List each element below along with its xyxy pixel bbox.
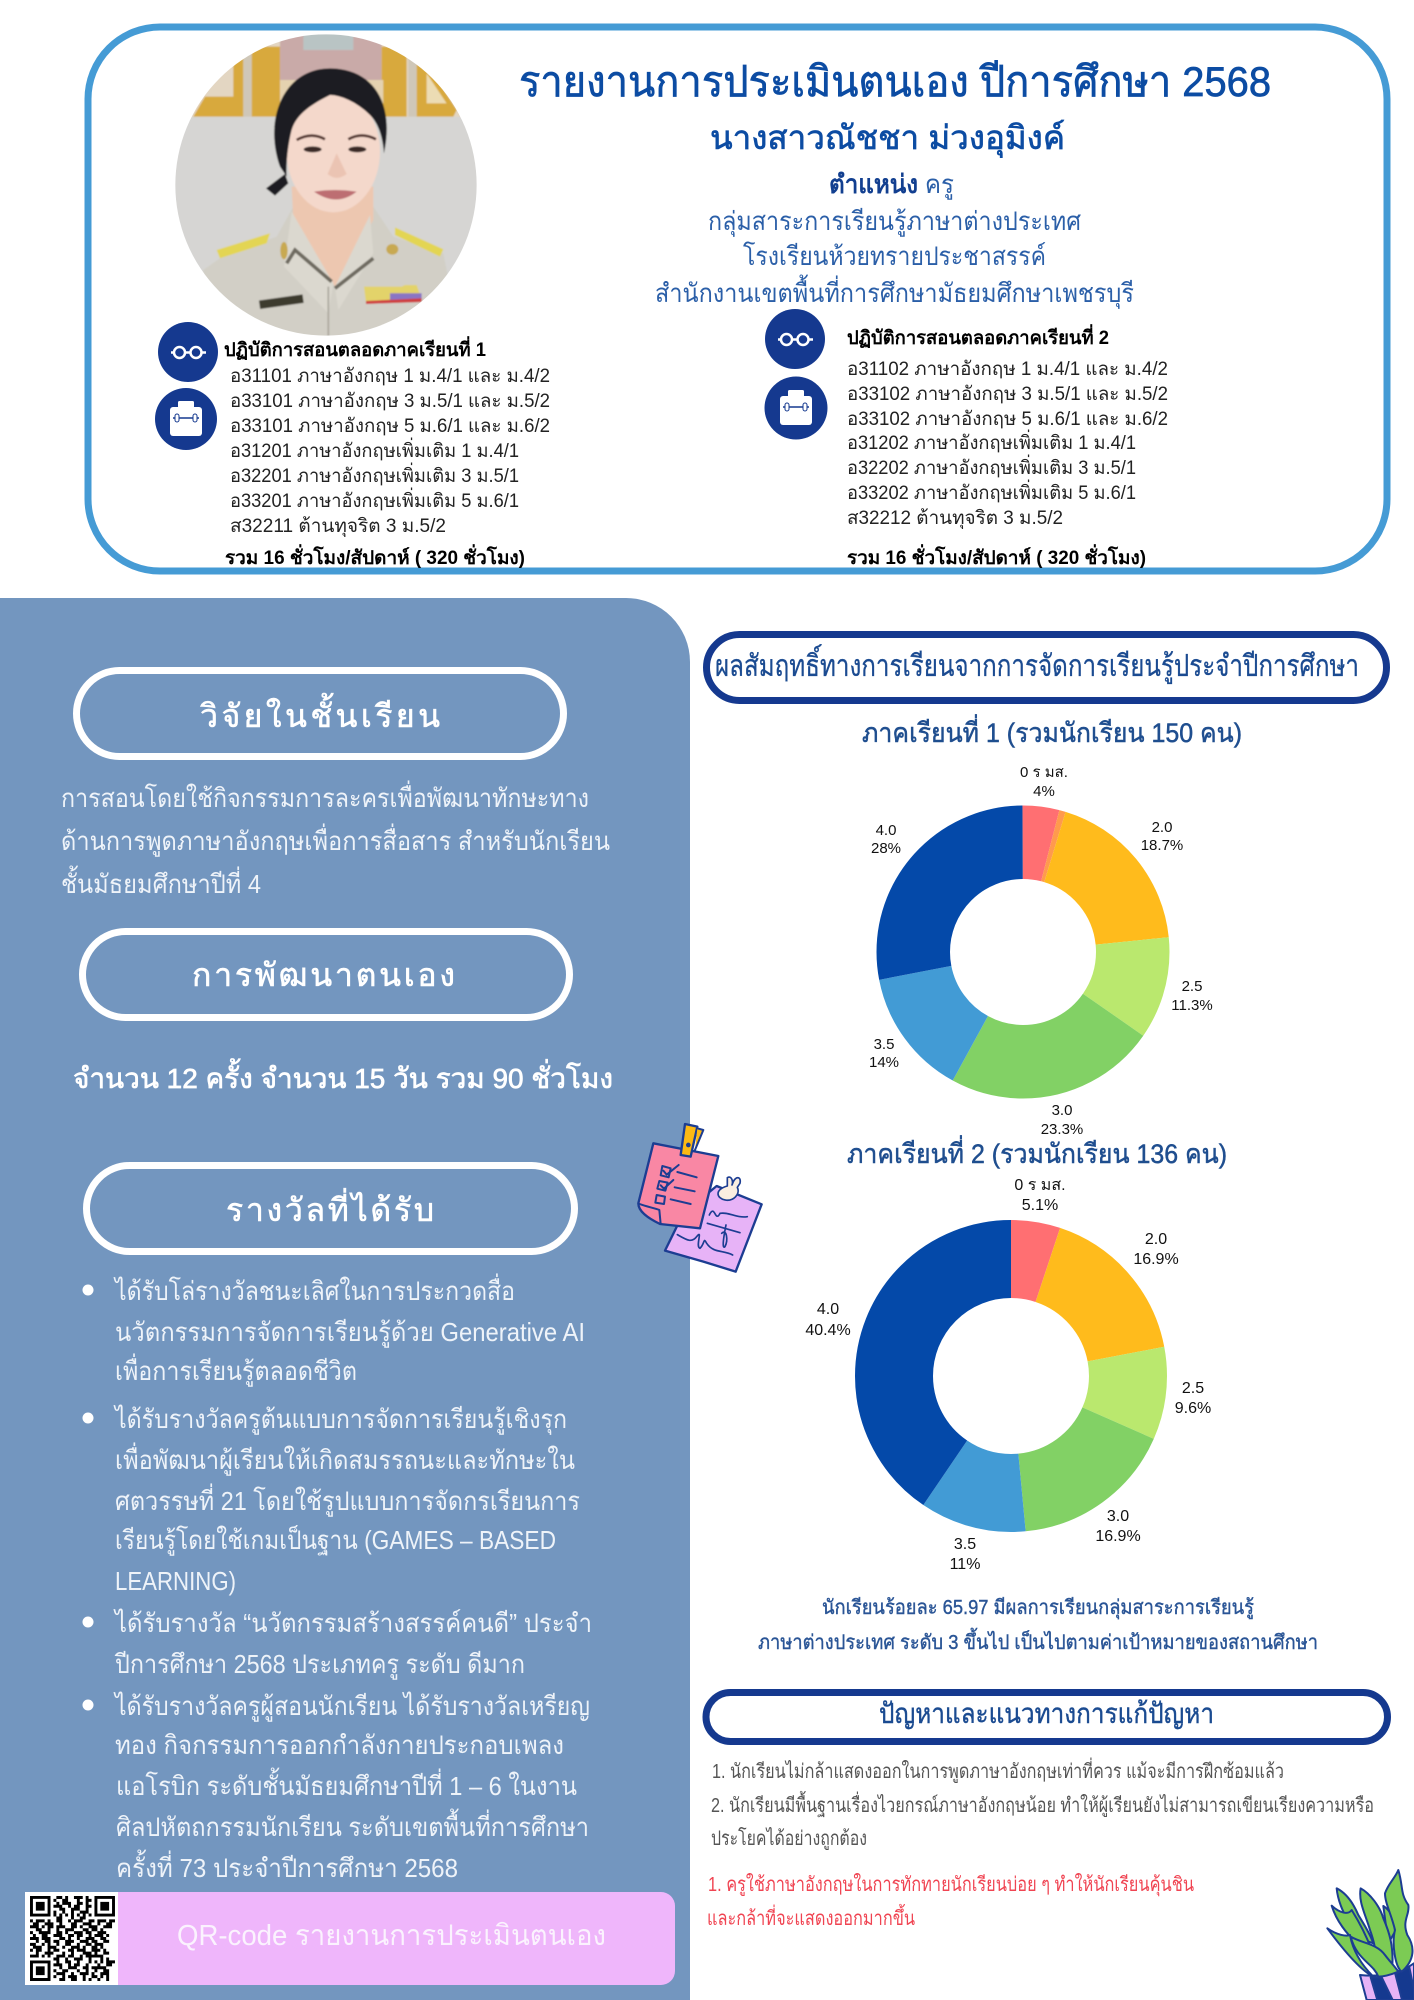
panel background xyxy=(0,598,690,2000)
semester 1 donut chart: 3.5 xyxy=(874,1036,894,1053)
semester 1 donut chart: 18.7% xyxy=(1141,837,1183,854)
problems text xyxy=(711,1757,1374,1851)
semester 1 donut chart xyxy=(869,764,1213,1138)
icon: sticky notes xyxy=(638,1124,762,1272)
solutions text xyxy=(707,1873,1194,1930)
semester 2 teaching list: อ31102 ภาษาอังกฤษ 1 ม.4/1 และ ม.4/2 xyxy=(847,359,1168,380)
problems heading xyxy=(706,1692,1388,1742)
semester 1 donut chart: 11.3% xyxy=(1171,997,1213,1014)
header panel xyxy=(88,27,1387,571)
semester 2 teaching list xyxy=(847,324,1168,569)
semester 2 donut chart: 2.0 xyxy=(1145,1231,1167,1248)
semester 2 donut chart: 4.0 xyxy=(817,1301,839,1318)
awards list: ได้รับรางวัลครูผู้สอนนักเรียน ได้รับรางวัลเหรียญ xyxy=(113,1691,590,1722)
semester 2 chart title: ภาคเรียนที่ 2 (รวมนักเรียน 136 คน) xyxy=(847,1135,1227,1169)
awards list: ครั้งที่ 73 ประจำปีการศึกษา 2568 xyxy=(116,1849,458,1883)
icon: briefcase semester 1 xyxy=(155,388,217,450)
semester 2 donut chart: 3.5 xyxy=(954,1536,976,1553)
icon: glasses semester 2 xyxy=(765,309,825,369)
semester 1 donut chart: 2.0 xyxy=(1152,819,1172,836)
semester 1 donut chart: 28% xyxy=(871,840,901,857)
semester 1 teaching list: ปฏิบัติการสอนตลอดภาคเรียนที่ 1 xyxy=(224,336,486,361)
semester 1 donut chart: 4% xyxy=(1033,783,1055,800)
left blue panel xyxy=(0,598,690,2000)
semester 2 teaching list: อ33102 ภาษาอังกฤษ 5 ม.6/1 และ ม.6/2 xyxy=(847,409,1168,430)
awards list: เพื่อการเรียนรู้ตลอดชีวิต xyxy=(115,1353,357,1387)
research description: ชั้นมัธยมศึกษาปีที่ 4 xyxy=(61,865,261,899)
semester 1 donut chart: 0 ร มส. xyxy=(1020,764,1068,781)
research description: การสอนโดยใช้กิจกรรมการละครเพื่อพัฒนาทักษะทาง xyxy=(61,780,589,813)
semester 1 teaching list: ส32211 ต้านทุจริต 3 ม.5/2 xyxy=(230,516,446,538)
semester 2 donut chart: 16.9% xyxy=(1095,1528,1141,1545)
semester 2 teaching list: อ33102 ภาษาอังกฤษ 3 ม.5/1 และ ม.5/2 xyxy=(847,384,1168,405)
awards list: ศิลปหัตถกรรมนักเรียน ระดับเขตพื้นที่การศึกษา xyxy=(116,1808,589,1842)
academic results heading xyxy=(706,634,1386,700)
icon: glasses semester 1 xyxy=(158,322,218,382)
semester 2 teaching list: ส32212 ต้านทุจริต 3 ม.5/2 xyxy=(847,508,1063,530)
QR code banner: QR-code รายงานการประเมินตนเอง xyxy=(177,1920,606,1952)
research description xyxy=(61,780,610,899)
semester 2 teaching list: ปฏิบัติการสอนตลอดภาคเรียนที่ 2 xyxy=(847,324,1109,349)
teacher name: นางสาวณัชชา ม่วงอุมิงค์ xyxy=(710,119,1065,158)
semester 2 donut chart: 16.9% xyxy=(1133,1251,1179,1268)
report title: รายงานการประเมินตนเอง ปีการศึกษา 2568 xyxy=(519,58,1271,105)
semester 1 donut chart: 23.3% xyxy=(1041,1121,1083,1138)
semester 2 teaching list: อ33202 ภาษาอังกฤษเพิ่มเติม 5 ม.6/1 xyxy=(847,479,1136,504)
semester 1 teaching list: อ31201 ภาษาอังกฤษเพิ่มเติม 1 ม.4/1 xyxy=(230,437,519,462)
semester 2 donut chart: 40.4% xyxy=(805,1322,851,1339)
awards list: เพื่อพัฒนาผู้เรียนให้เกิดสมรรถนะและทักษะใน xyxy=(115,1442,575,1476)
semester 1 donut chart: 4.0 xyxy=(876,822,896,839)
semester 2 donut chart: 5.1% xyxy=(1022,1197,1058,1214)
QR code banner xyxy=(118,1892,675,1985)
awards list: ได้รับรางวัลครูต้นแบบการจัดการเรียนรู้เชิงรุก xyxy=(113,1404,567,1435)
semester 1 chart title: ภาคเรียนที่ 1 (รวมนักเรียน 150 คน) xyxy=(862,714,1242,748)
self development summary: จำนวน 12 ครั้ง จำนวน 15 วัน รวม 90 ชั่วโมง xyxy=(73,1058,613,1094)
awards list: นวัตกรรมการจัดการเรียนรู้ด้วย Generative AI xyxy=(115,1317,585,1348)
awards list: แอโรบิก ระดับชั้นมัธยมศึกษาปีที่ 1 – 6 ในงาน xyxy=(116,1767,577,1801)
solutions text: และกล้าที่จะแสดงออกมากขึ้น xyxy=(707,1904,915,1930)
awards list: ได้รับรางวัล “นวัตกรรมสร้างสรรค์คนดี” ประจำ xyxy=(113,1608,592,1638)
position details xyxy=(655,169,1134,309)
awards list: ศตวรรษที่ 21 โดยใช้รูปแบบการจัดกรเรียนการ xyxy=(115,1483,580,1517)
awards list: LEARNING) xyxy=(115,1566,236,1596)
icon: potted plant xyxy=(1327,1870,1414,2000)
semester 1 teaching list: อ33101 ภาษาอังกฤษ 5 ม.6/1 และ ม.6/2 xyxy=(230,416,550,437)
problems text: ประโยคได้อย่างถูกต้อง xyxy=(711,1827,867,1851)
solutions text: 1. ครูใช้ภาษาอังกฤษในการทักทายนักเรียนบ่อย ๆ ทำให้นักเรียนคุ้นชิน xyxy=(708,1873,1194,1897)
semester 2 donut chart: 11% xyxy=(950,1556,980,1573)
position details: ตำแหน่ง ครู xyxy=(829,169,954,200)
QR code xyxy=(25,1892,118,1985)
awards heading: รางวัลที่ได้รับ xyxy=(226,1188,434,1228)
results summary xyxy=(758,1597,1318,1654)
semester 1 teaching list: รวม 16 ชั่วโมง/สัปดาห์ ( 320 ชั่วโมง) xyxy=(225,544,525,569)
awards list: ปีการศึกษา 2568 ประเภทครู ระดับ ดีมาก xyxy=(114,1649,525,1680)
semester 2 donut chart: 2.5 xyxy=(1182,1380,1204,1397)
semester 2 teaching list: อ32202 ภาษาอังกฤษเพิ่มเติม 3 ม.5/1 xyxy=(847,454,1136,479)
self development heading xyxy=(82,932,570,1018)
research heading: วิจัยในชั้นเรียน xyxy=(200,693,440,734)
semester 1 donut chart: 3.0 xyxy=(1052,1102,1072,1119)
semester 2 teaching list: รวม 16 ชั่วโมง/สัปดาห์ ( 320 ชั่วโมง) xyxy=(847,544,1146,569)
header frame xyxy=(88,27,1387,571)
problems heading: ปัญหาและแนวทางการแก้ปัญหา xyxy=(879,1698,1214,1729)
position details: กลุ่มสาระการเรียนรู้ภาษาต่างประเทศ xyxy=(708,206,1081,237)
portrait photo xyxy=(173,33,480,337)
results summary: ภาษาต่างประเทศ ระดับ 3 ขึ้นไป เป็นไปตามค่าเป้าหมายของสถานศึกษา xyxy=(758,1628,1318,1654)
semester 2 donut chart xyxy=(805,1177,1211,1573)
results summary: นักเรียนร้อยละ 65.97 มีผลการเรียนกลุ่มสาระการเรียนรู้ xyxy=(822,1597,1254,1620)
semester 1 teaching list: อ33201 ภาษาอังกฤษเพิ่มเติม 5 ม.6/1 xyxy=(230,487,519,512)
research description: ด้านการพูดภาษาอังกฤษเพื่อการสื่อสาร สำหรับนักเรียน xyxy=(61,823,610,857)
position details: สำนักงานเขตพื้นที่การศึกษามัธยมศึกษาเพชรบุรี xyxy=(655,274,1134,309)
awards list: เรียนรู้โดยใช้เกมเป็นฐาน (GAMES – BASED xyxy=(115,1524,556,1556)
awards list: ทอง กิจกรรมการออกกำลังกายประกอบเพลง xyxy=(115,1730,564,1760)
semester 2 donut chart: 0 ร มส. xyxy=(1014,1177,1066,1194)
research heading xyxy=(76,670,564,756)
problems text: 1. นักเรียนไม่กล้าแสดงออกในการพูดภาษาอังกฤษเท่าที่ควร แม้จะมีการฝึกซ้อมแล้ว xyxy=(712,1757,1284,1784)
semester 1 teaching list: อ32201 ภาษาอังกฤษเพิ่มเติม 3 ม.5/1 xyxy=(230,462,519,487)
semester 2 donut chart: 3.0 xyxy=(1107,1508,1129,1525)
awards list xyxy=(82,1273,592,1883)
semester 2 donut chart: 9.6% xyxy=(1175,1400,1211,1417)
semester 2 teaching list: อ31202 ภาษาอังกฤษเพิ่มเติม 1 ม.4/1 xyxy=(847,429,1136,454)
awards heading xyxy=(86,1166,574,1252)
position details: โรงเรียนห้วยทรายประชาสรรค์ xyxy=(743,241,1046,271)
awards list: ได้รับโล่รางวัลชนะเลิศในการประกวดสื่อ xyxy=(113,1273,515,1306)
self development heading: การพัฒนาตนเอง xyxy=(192,957,455,993)
semester 1 donut chart: 14% xyxy=(869,1054,899,1071)
icon: briefcase semester 2 xyxy=(764,376,828,440)
semester 1 teaching list xyxy=(224,336,550,569)
semester 1 teaching list: อ31101 ภาษาอังกฤษ 1 ม.4/1 และ ม.4/2 xyxy=(230,366,550,387)
semester 1 teaching list: อ33101 ภาษาอังกฤษ 3 ม.5/1 และ ม.5/2 xyxy=(230,391,550,412)
semester 1 donut chart: 2.5 xyxy=(1182,978,1202,995)
